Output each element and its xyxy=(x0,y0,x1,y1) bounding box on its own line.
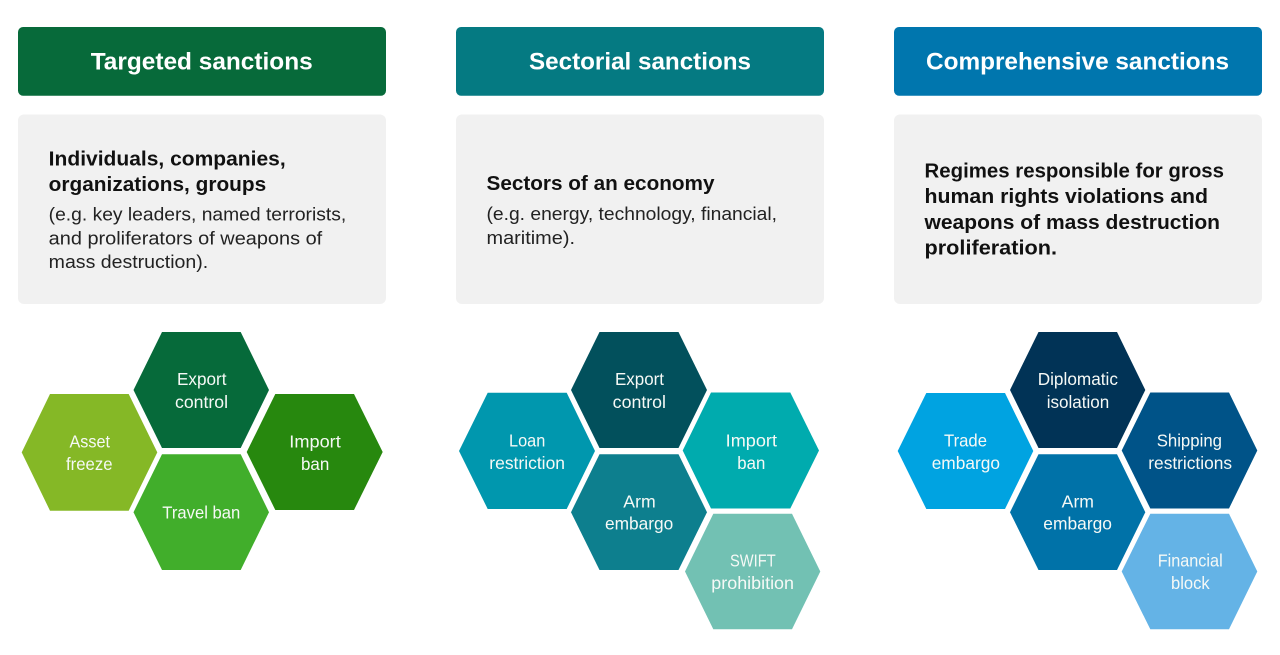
hexagon: trade embargo xyxy=(898,393,1033,509)
heading: targeted sanctions xyxy=(18,27,386,96)
hexagon: swift prohibition xyxy=(685,514,820,629)
hexagon: arm embargo: embargo xyxy=(605,514,673,534)
hexagon: export control: Export xyxy=(177,369,227,389)
hexagon: travel ban: Travel ban xyxy=(162,502,240,522)
panel: targeted sanctions description: Individuals, companies, xyxy=(49,148,286,170)
hexagon: trade embargo: embargo xyxy=(932,453,1000,473)
hexagon: loan restriction: Loan xyxy=(509,431,545,451)
hexagon: travel ban xyxy=(134,454,269,570)
panel: comprehensive sanctions description: weapons of mass destruction xyxy=(923,212,1220,234)
panel: comprehensive sanctions description: Regimes responsible for gross xyxy=(924,160,1224,182)
hexagon: asset freeze xyxy=(22,394,157,511)
hexagon: import ban xyxy=(247,394,383,510)
hexagon: shipping restrictions: Shipping xyxy=(1157,431,1222,451)
hexagon: trade embargo: Trade xyxy=(944,431,987,451)
panel: sectorial sanctions description: Sectors of an economy xyxy=(486,173,715,195)
hexagon: swift prohibition: prohibition xyxy=(711,573,794,593)
hexagon: import ban xyxy=(683,392,819,508)
hexagon: financial block: Financial xyxy=(1158,551,1223,571)
heading: targeted sanctions: Targeted sanctions xyxy=(91,48,313,76)
panel: comprehensive sanctions description xyxy=(894,114,1262,304)
column: sectorial sanctions xyxy=(456,27,824,629)
hexagon: diplomatic isolation: Diplomatic xyxy=(1038,369,1118,389)
panel: comprehensive sanctions description: human rights violations and xyxy=(924,186,1208,208)
hexagon: export control xyxy=(571,332,707,448)
panel: sectorial sanctions description: maritime). xyxy=(486,227,575,248)
hexagon: import ban: Import xyxy=(726,431,777,451)
heading: sectorial sanctions: Sectorial sanctions xyxy=(529,48,751,76)
hexagon: export control: control xyxy=(613,392,666,412)
heading: sectorial sanctions xyxy=(456,27,824,96)
hexagon: asset freeze: Asset xyxy=(70,431,110,451)
hexagon cluster: sectorial measures xyxy=(459,332,820,629)
hexagon: arm embargo: Arm xyxy=(623,492,656,512)
panel: comprehensive sanctions description: proliferation. xyxy=(924,238,1057,260)
hexagon: shipping restrictions xyxy=(1122,392,1257,508)
hexagon: arm embargo: Arm xyxy=(1062,492,1094,512)
hexagon: import ban: Import xyxy=(289,431,341,451)
panel: targeted sanctions description: and proliferators of weapons of xyxy=(49,227,323,248)
hexagon: arm embargo: embargo xyxy=(1043,514,1112,534)
panel: sectorial sanctions description: (e.g. energy, technology, financial, xyxy=(486,203,777,224)
heading: comprehensive sanctions: Comprehensive sanctions xyxy=(926,48,1229,76)
hexagon: diplomatic isolation: isolation xyxy=(1047,392,1109,412)
panel: targeted sanctions description: organizations, groups xyxy=(49,174,266,196)
hexagon: export control: control xyxy=(175,392,228,412)
hexagon: diplomatic isolation xyxy=(1010,332,1145,448)
column: comprehensive sanctions xyxy=(894,27,1262,629)
hexagon: swift prohibition: SWIFT xyxy=(730,551,776,571)
hexagon cluster: targeted measures xyxy=(22,332,383,570)
heading: comprehensive sanctions xyxy=(894,27,1262,96)
hexagon: loan restriction: restriction xyxy=(489,453,565,473)
hexagon: financial block xyxy=(1122,514,1257,629)
hexagon: import ban: ban xyxy=(737,453,765,473)
panel: targeted sanctions description: (e.g. key leaders, named terrorists, xyxy=(49,204,346,224)
hexagon: asset freeze: freeze xyxy=(66,454,112,474)
hexagon cluster: comprehensive measures xyxy=(898,332,1257,629)
hexagon: import ban: ban xyxy=(301,454,329,474)
hexagon: loan restriction xyxy=(459,393,595,509)
hexagon: arm embargo xyxy=(571,454,707,570)
column: targeted sanctions xyxy=(18,27,386,570)
hexagon: shipping restrictions: restrictions xyxy=(1148,453,1232,473)
hexagon: export control xyxy=(134,332,269,448)
hexagon: financial block: block xyxy=(1171,573,1210,593)
hexagon: arm embargo xyxy=(1010,454,1145,570)
hexagon: export control: Export xyxy=(615,369,664,389)
panel: sectorial sanctions description xyxy=(456,114,824,304)
panel: targeted sanctions description xyxy=(18,114,386,304)
panel: targeted sanctions description: mass destruction). xyxy=(49,251,208,272)
